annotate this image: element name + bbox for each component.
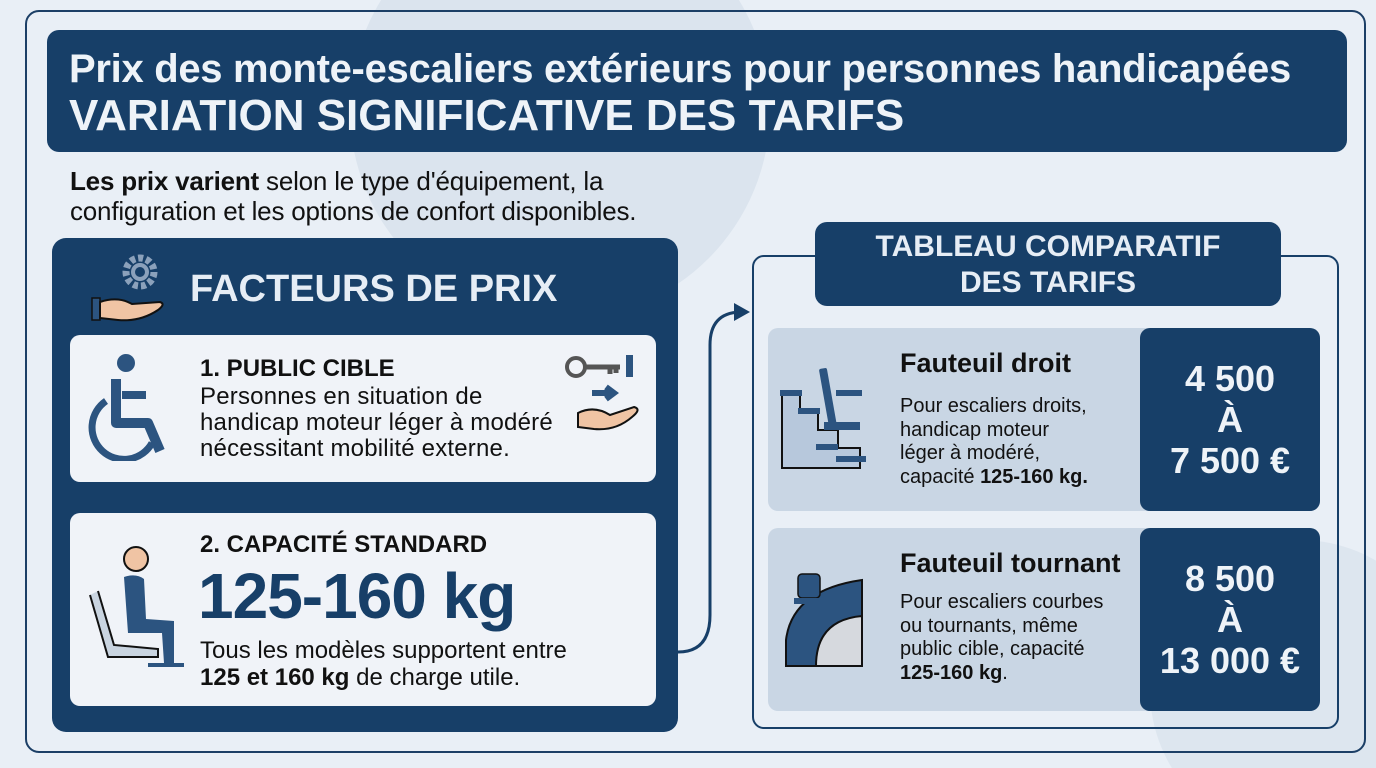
card: public cible: nécessitant mobilité externe. (200, 435, 510, 462)
price box: 4 500 (1185, 358, 1275, 399)
intro text: Les prix varient selon le type d'équipement, la (70, 166, 603, 196)
card: fauteuil droit: Pour escaliers droits, (900, 395, 1087, 417)
card: public cible (70, 335, 656, 482)
price box: À (1217, 599, 1243, 640)
panel: tableau comparatif (752, 255, 1339, 729)
card: capacite standard: 125 et 160 kg de charge utile. (200, 664, 520, 691)
tab heading (815, 222, 1281, 306)
icon: key hand (565, 355, 639, 430)
intro text: configuration et les options de confort disponibles. (70, 196, 636, 226)
card: public cible: handicap moteur léger à modéré (200, 409, 553, 436)
icon: curved stairlift (785, 573, 863, 667)
card: capacite standard: Tous les modèles supportent entre (200, 637, 567, 664)
card: fauteuil tournant (768, 528, 1320, 711)
card: fauteuil droit: handicap moteur (900, 418, 1049, 440)
icon: seated person (89, 546, 184, 667)
price box: 13 000 € (1160, 640, 1300, 681)
price box: À (1217, 399, 1243, 440)
card: capacite standard (70, 513, 656, 706)
tab heading: TABLEAU COMPARATIF (876, 230, 1220, 263)
card: capacite standard: 2. CAPACITÉ STANDARD (200, 531, 487, 558)
card: fauteuil droit (768, 328, 1320, 511)
title bar: VARIATION SIGNIFICATIVE DES TARIFS (69, 91, 904, 140)
intro text (70, 166, 636, 226)
card: public cible: 1. PUBLIC CIBLE (200, 355, 395, 382)
card: fauteuil droit: capacité 125-160 kg. (900, 466, 1088, 488)
card: public cible: Personnes en situation de (200, 383, 483, 410)
card: fauteuil tournant: Fauteuil tournant (900, 548, 1120, 578)
title bar (47, 30, 1347, 152)
price box (1140, 528, 1320, 711)
heading: FACTEURS DE PRIX (190, 268, 557, 310)
card: fauteuil droit: Fauteuil droit (900, 348, 1071, 378)
price box: 8 500 (1185, 558, 1275, 599)
title bar: Prix des monte-escaliers extérieurs pour personnes handicapées (69, 47, 1291, 91)
card: fauteuil tournant: ou tournants, même (900, 614, 1078, 636)
card: capacite standard: 125-160 kg (198, 560, 515, 632)
card: fauteuil droit: léger à modéré, (900, 442, 1040, 464)
tab heading: DES TARIFS (960, 266, 1136, 299)
panel: facteurs de prix (52, 238, 678, 732)
icon: straight stairlift (780, 368, 866, 469)
icon: wheelchair (88, 354, 165, 461)
price box (1140, 328, 1320, 511)
icon: gear hand (91, 254, 164, 322)
card: fauteuil tournant: public cible, capacité (900, 638, 1085, 660)
arrow: connector (678, 303, 750, 654)
card: fauteuil tournant: Pour escaliers courbes (900, 591, 1103, 613)
price box: 7 500 € (1170, 440, 1290, 481)
card: fauteuil tournant: 125-160 kg. (900, 662, 1008, 684)
